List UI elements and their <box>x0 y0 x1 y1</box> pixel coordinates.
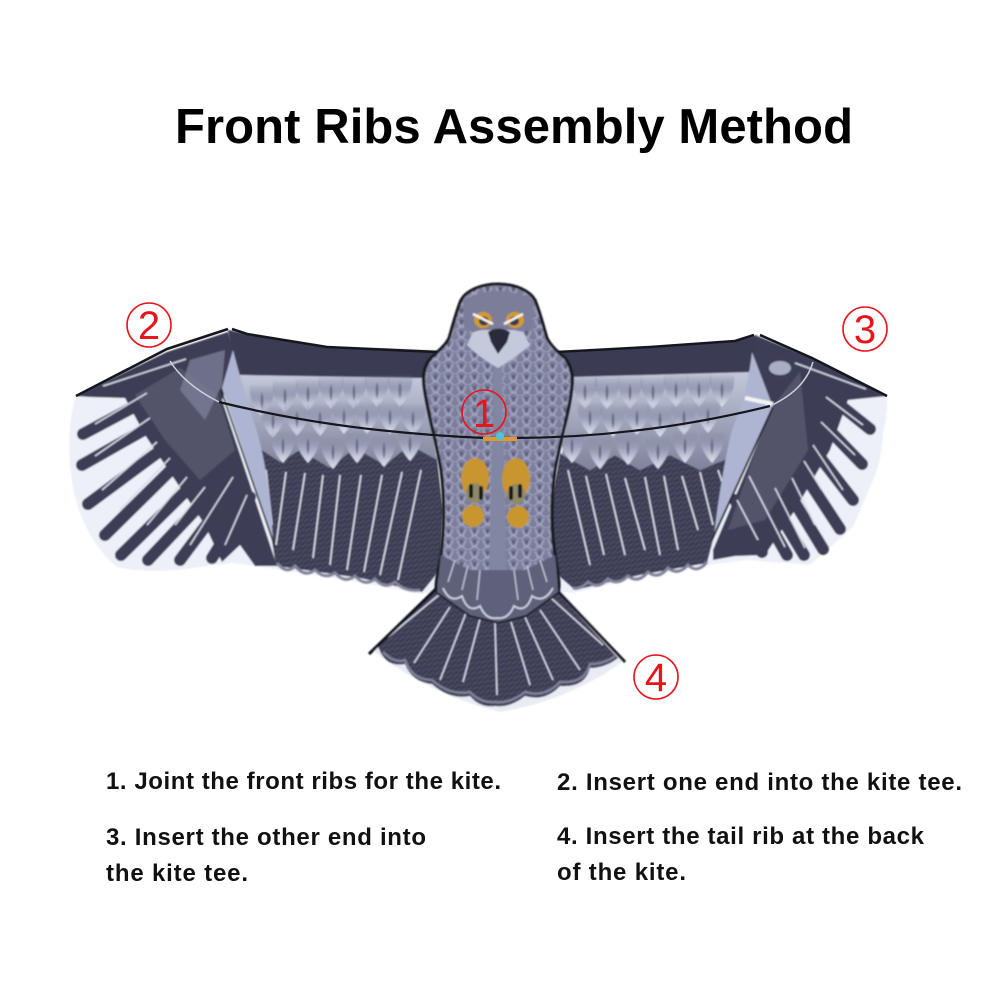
step 3 text <box>106 824 426 887</box>
left wing top band <box>228 330 440 380</box>
front ribs rod <box>170 361 813 440</box>
callout: number 3: 3 <box>854 308 876 352</box>
step 4 text: of the kite. <box>557 859 686 886</box>
right wing <box>547 335 887 593</box>
tail <box>369 588 625 712</box>
callout: number 1: 1 <box>473 392 495 436</box>
tail feather shafts <box>388 594 603 695</box>
right wing membrane <box>550 336 887 593</box>
icon: left talon <box>461 458 489 527</box>
kite tee connector <box>483 432 517 440</box>
left wing wrist feathers <box>180 350 225 445</box>
right wing hand feathers <box>713 336 887 560</box>
left wing membrane <box>69 340 445 594</box>
left wing secondary shafts <box>266 470 421 580</box>
tail edge rods <box>369 588 437 654</box>
left wing secondary feathers <box>257 440 443 592</box>
step 3 text: 3. Insert the other end into <box>106 824 426 851</box>
kite illustration <box>69 284 887 712</box>
step 4 text: 4. Insert the tail rib at the back <box>557 823 925 850</box>
callout: number 2: 2 <box>138 304 160 348</box>
right wing coverts <box>562 372 752 470</box>
tail membrane <box>372 590 625 712</box>
callout: number 2 <box>127 303 171 348</box>
icon: beak <box>488 328 510 354</box>
callout: number 3 <box>843 307 887 352</box>
left wing coverts <box>238 375 437 468</box>
icon: right talon <box>502 458 530 528</box>
callout: number 4: 4 <box>645 656 667 700</box>
right wing top band <box>557 335 757 378</box>
right wing secondary shafts <box>568 470 725 565</box>
step 1 text: 1. Joint the front ribs for the kite. <box>106 768 501 795</box>
head face <box>467 328 530 368</box>
title: Front Ribs Assembly Method <box>175 100 853 154</box>
body <box>424 284 572 622</box>
right wing strut panel <box>714 352 773 535</box>
icon: left eye <box>473 312 493 328</box>
tail feathers <box>378 590 618 706</box>
body centre stripe <box>488 365 507 622</box>
step 4 text <box>557 823 925 886</box>
left wing strut panel <box>222 350 273 540</box>
step 2 text: 2. Insert one end into the kite tee. <box>557 769 962 796</box>
icon: right eye <box>504 312 524 328</box>
left wing hand feathers <box>76 332 277 566</box>
callout: number 4 <box>634 655 678 700</box>
left wing <box>69 330 445 594</box>
left wing hand feather shafts <box>95 359 247 545</box>
wing leading edge rods <box>76 329 887 396</box>
callout: number 1 <box>462 390 506 436</box>
right wing hand feather shafts <box>737 363 866 548</box>
right wing secondary feathers <box>547 453 731 590</box>
step 3 text: the kite tee. <box>106 860 248 887</box>
lower body fan <box>437 555 558 622</box>
